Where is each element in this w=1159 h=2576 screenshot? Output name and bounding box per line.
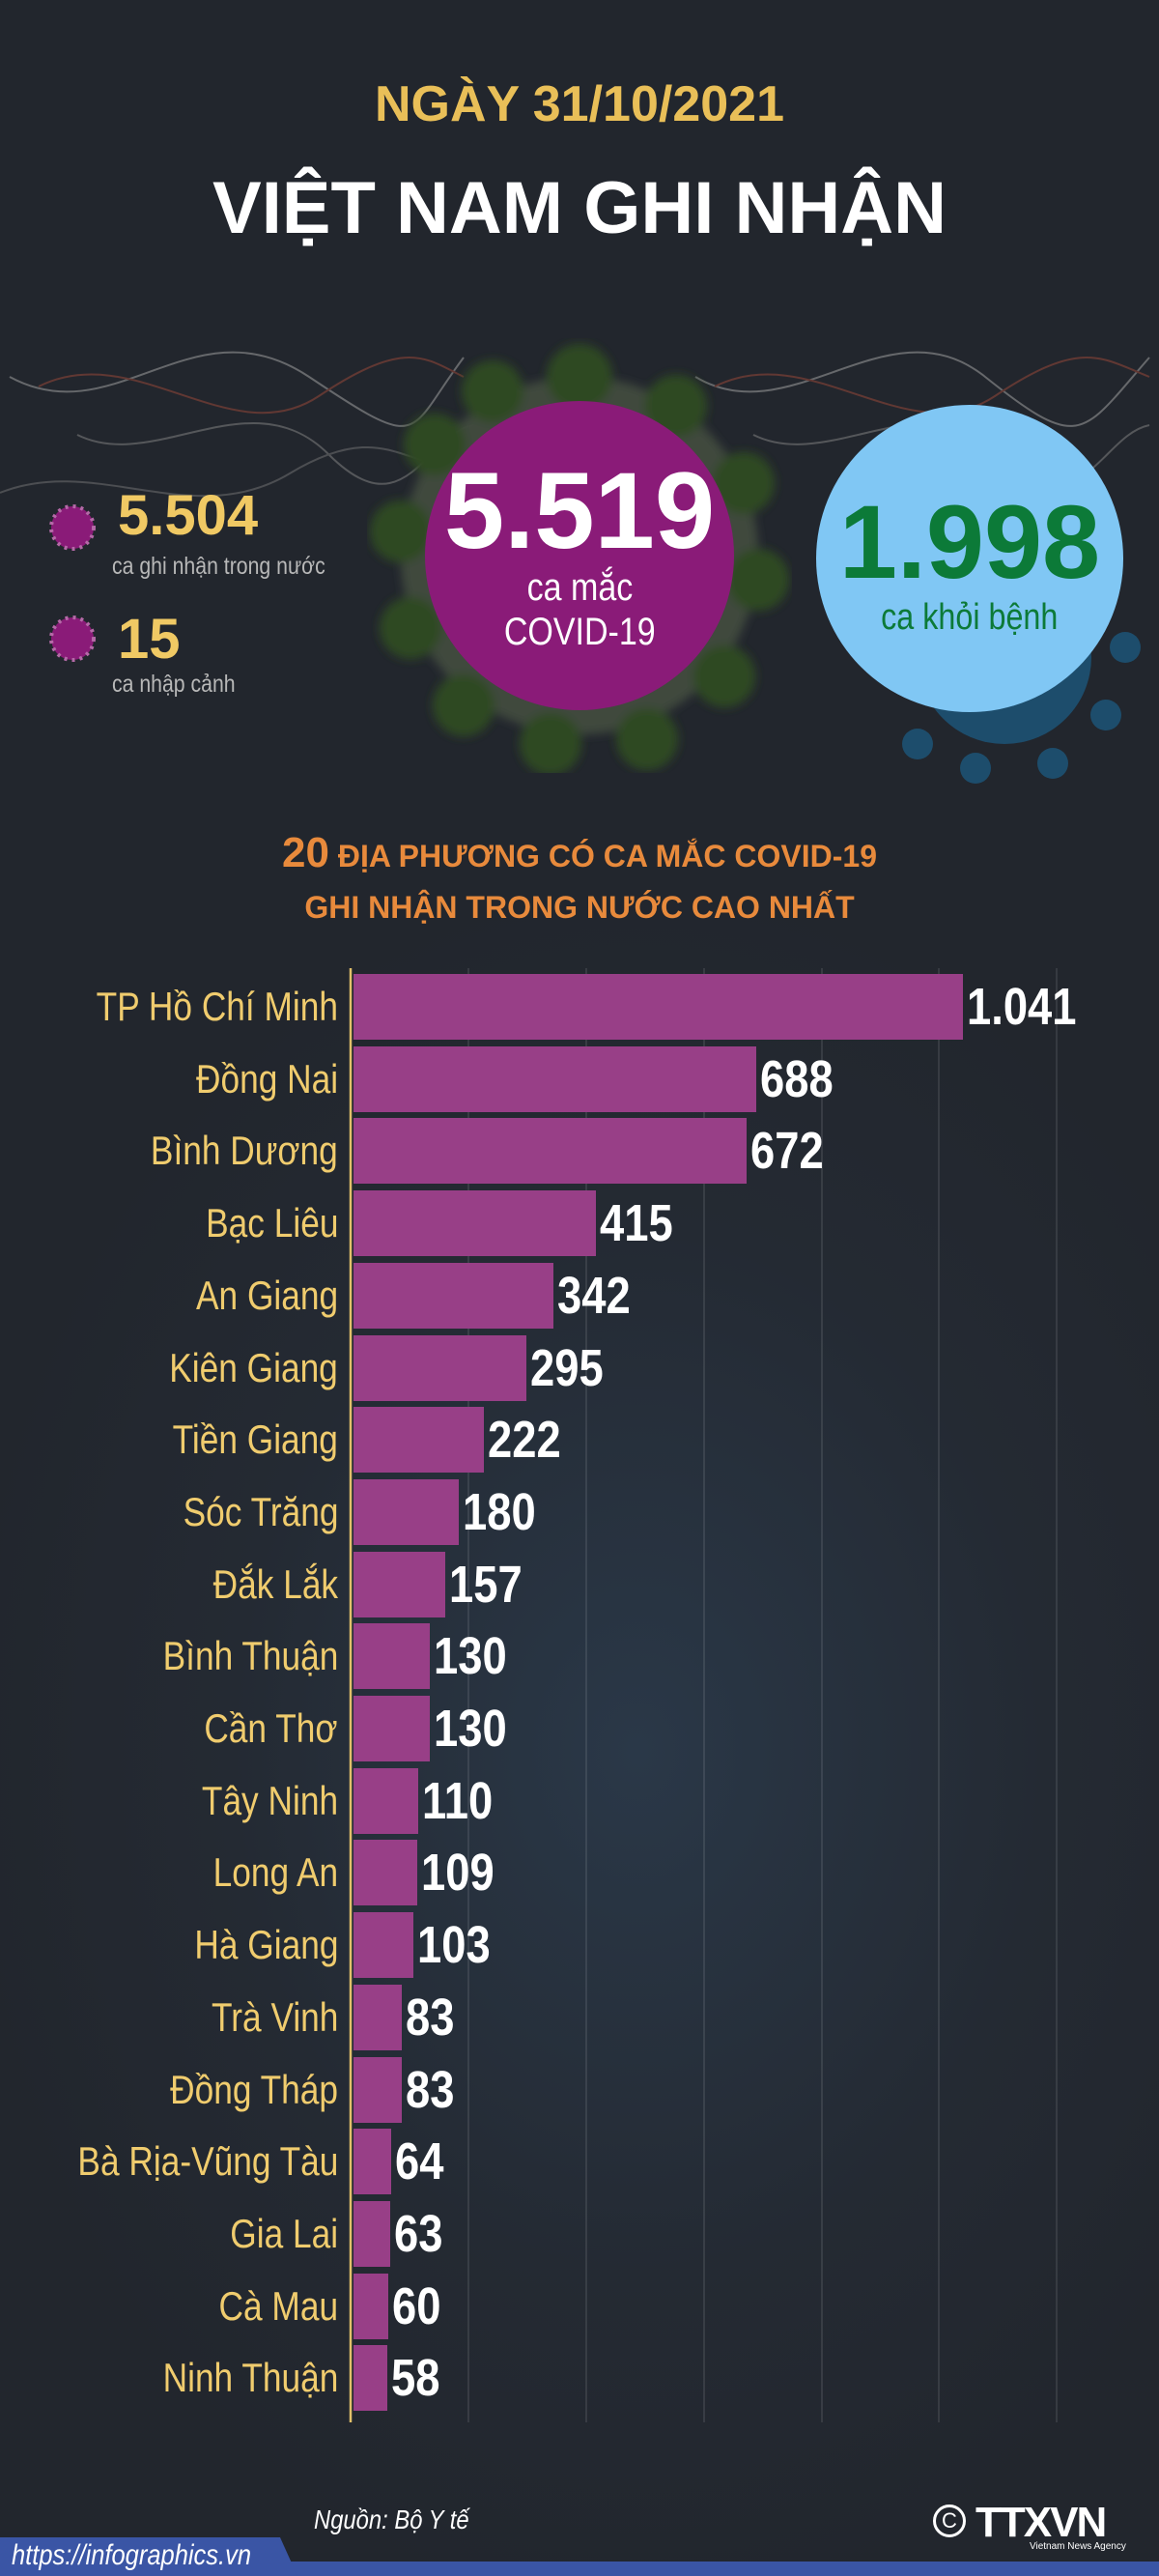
bar chart — [77, 974, 1077, 2411]
bar chart: 64 — [395, 2132, 443, 2190]
bar chart: Đồng Nai — [196, 1056, 338, 1102]
logo TTXVN: Vietnam News Agency — [1030, 2541, 1126, 2552]
bar chart: Hà Giang — [194, 1922, 338, 1967]
bar chart: 83 — [406, 2061, 454, 2119]
stat: domestic — [49, 484, 325, 580]
bar chart: Tiền Giang — [173, 1417, 338, 1462]
bar chart: Sóc Trăng — [183, 1489, 338, 1534]
bar chart: 295 — [530, 1339, 604, 1397]
bar chart: 342 — [557, 1267, 631, 1325]
stat: imported: ca nhập cảnh — [112, 671, 236, 698]
bar chart: TP Hồ Chí Minh — [97, 984, 338, 1029]
stat: domestic: 5.504 — [118, 484, 258, 547]
bar chart: Đắk Lắk — [213, 1561, 338, 1607]
icon: blue virus — [902, 632, 1141, 784]
circle: total cases — [425, 401, 734, 710]
bar chart: 157 — [449, 1556, 523, 1614]
stat: domestic: ca ghi nhận trong nước — [112, 553, 325, 580]
bar chart: Bạc Liêu — [206, 1200, 338, 1245]
title date: NGÀY 31/10/2021 — [375, 76, 784, 132]
source note: Nguồn: Bộ Y tế — [314, 2504, 469, 2534]
footer bar — [0, 2562, 1159, 2576]
bar chart: 415 — [600, 1194, 673, 1252]
bar chart: 180 — [463, 1483, 536, 1541]
bar chart: 130 — [434, 1627, 507, 1685]
icon: small virus — [49, 615, 96, 662]
bar chart: 222 — [488, 1411, 561, 1469]
bar chart: 110 — [422, 1772, 493, 1830]
text: https://infographics.vn — [12, 2539, 251, 2571]
bar chart: 688 — [760, 1050, 834, 1108]
circle: total cases: ca mắc — [526, 566, 633, 609]
stat: imported — [49, 608, 236, 698]
chart heading: GHI NHẬN TRONG NƯỚC CAO NHẤT — [304, 890, 855, 925]
bar chart: 58 — [391, 2349, 439, 2407]
circle: total cases: 5.519 — [444, 450, 715, 571]
bar chart: Gia Lai — [230, 2211, 338, 2256]
bar chart: Kiên Giang — [169, 1345, 338, 1390]
icon: small virus — [49, 504, 96, 551]
logo TTXVN: C — [942, 2508, 957, 2533]
bar chart: Long An — [212, 1849, 338, 1895]
circle: recovered: 1.998 — [839, 483, 1100, 600]
bar chart: 672 — [750, 1122, 824, 1180]
bar chart: Cà Mau — [218, 2283, 338, 2329]
chart heading — [282, 829, 877, 925]
bar chart: 63 — [394, 2205, 442, 2263]
bar chart: 1.041 — [967, 978, 1077, 1036]
bar chart: Trà Vinh — [212, 1994, 338, 2040]
bar chart: Đồng Tháp — [170, 2067, 338, 2112]
icon: green virus — [367, 341, 792, 773]
circle: total cases: COVID-19 — [504, 611, 655, 653]
bar chart: An Giang — [196, 1273, 338, 1318]
logo TTXVN: TTXVN — [975, 2499, 1105, 2546]
stat: imported: 15 — [118, 608, 181, 671]
bar chart: 130 — [434, 1700, 507, 1758]
circle: recovered — [816, 405, 1123, 712]
logo TTXVN — [933, 2499, 1126, 2552]
bar chart: Bà Rịa-Vũng Tàu — [77, 2138, 338, 2184]
bar chart: Ninh Thuận — [162, 2355, 338, 2400]
circle: recovered: ca khỏi bệnh — [881, 597, 1059, 638]
bar chart: Bình Thuận — [162, 1633, 338, 1678]
bar chart: Bình Dương — [151, 1128, 338, 1173]
chart heading: 20 ĐỊA PHƯƠNG CÓ CA MẮC COVID-19 — [282, 829, 877, 876]
grid lines — [350, 968, 1058, 2422]
bar chart: 103 — [417, 1916, 491, 1974]
bar chart: Cần Thơ — [205, 1705, 338, 1751]
bar chart: 109 — [421, 1844, 495, 1902]
footer url tab — [0, 2537, 292, 2562]
bar chart: 83 — [406, 1989, 454, 2046]
title main: VIỆT NAM GHI NHẬN — [212, 167, 947, 249]
bar chart: 60 — [392, 2277, 440, 2335]
bar chart: Tây Ninh — [202, 1778, 338, 1823]
decorative wavy lines — [0, 352, 1150, 497]
